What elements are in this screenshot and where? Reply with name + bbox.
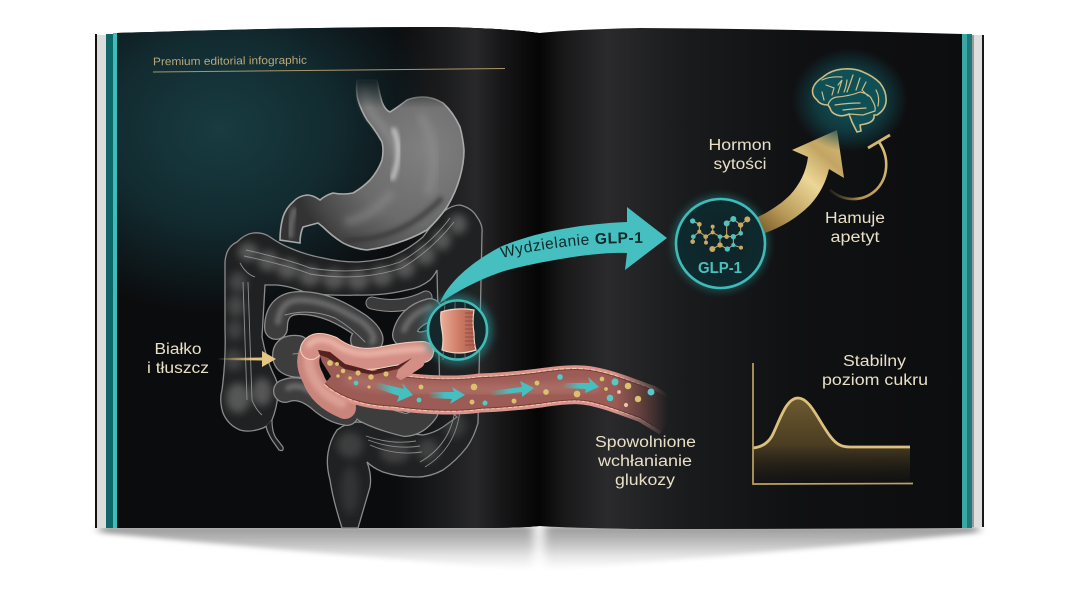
icon: brain xyxy=(792,48,908,152)
intestine wall and lumen xyxy=(335,372,670,418)
label: satiety hormone: sytości xyxy=(714,156,766,173)
label: slowed glucose absorption xyxy=(595,434,696,489)
label: stable sugar level: Stabilny xyxy=(843,353,906,370)
closed upper loop xyxy=(309,340,423,375)
small intestine loops xyxy=(276,297,430,425)
pink intestine with transparent lumen xyxy=(308,340,670,418)
left page background xyxy=(117,27,539,528)
open lumen wedge xyxy=(318,350,412,406)
label: suppresses appetite: Hamuje xyxy=(825,210,885,227)
icon: GLP-1 molecule xyxy=(690,216,750,252)
callout: nutrients: Białko xyxy=(154,341,202,358)
icon: intestine segment xyxy=(441,309,476,353)
book edge: left sheets and teal band xyxy=(95,33,117,528)
arrow: nutrients into the intestine xyxy=(217,351,276,367)
inhibition symbol xyxy=(830,135,890,199)
magnified intestine circle xyxy=(422,295,492,365)
label: suppresses appetite: apetyt xyxy=(830,229,880,246)
right page background xyxy=(539,28,962,529)
GLP-1 circle xyxy=(672,196,768,292)
label: stable sugar level xyxy=(822,353,928,389)
stomach and duodenum xyxy=(280,80,464,250)
GLP-1 circle: GLP-1 xyxy=(698,260,742,277)
teal arrow: GLP-1 secretion: Wydzielanie GLP-1 xyxy=(500,232,642,258)
label: satiety hormone xyxy=(708,137,772,173)
lower fold behind the tube xyxy=(308,348,345,408)
flow arrows in lumen xyxy=(375,377,599,404)
header label: Premium editorial infographic xyxy=(153,55,308,68)
label: satiety hormone: Hormon xyxy=(708,137,772,154)
book edge: right sheets and teal band xyxy=(962,34,984,528)
label: slowed glucose absorption: wchłanianie xyxy=(597,453,692,470)
label: slowed glucose absorption: glukozy xyxy=(615,472,675,489)
header label xyxy=(153,55,505,72)
callout: nutrients: i tłuszcz xyxy=(147,360,209,377)
large intestine xyxy=(221,205,482,528)
label: slowed glucose absorption: Spowolnione xyxy=(595,434,696,451)
label: suppresses appetite xyxy=(825,210,885,246)
callout: nutrients xyxy=(147,341,209,377)
chart: blood glucose curve xyxy=(753,363,913,484)
label: stable sugar level: poziom cukru xyxy=(822,372,928,389)
anatomy: grey digestive tract xyxy=(221,80,482,528)
chyme particles xyxy=(327,360,655,407)
teal arrow: GLP-1 secretion xyxy=(440,207,667,303)
book drop shadow xyxy=(100,526,978,570)
appendix xyxy=(266,420,283,451)
gold arrow to brain xyxy=(758,130,844,233)
infographic: open magazine spread xyxy=(94,27,984,566)
